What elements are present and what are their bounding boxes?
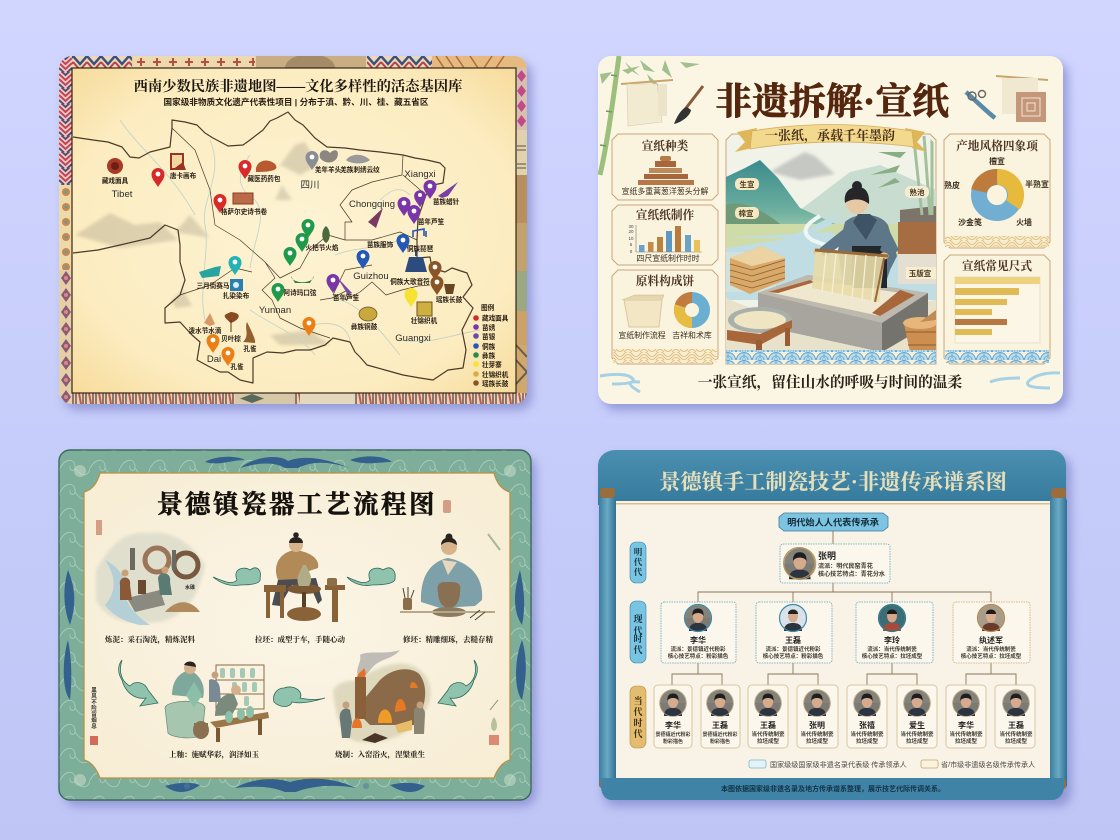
- map item labels: 苗年芦笙: [418, 217, 445, 226]
- node: Jiu Jianjun modern: 流派：当代传统制瓷: [966, 645, 1016, 653]
- sub-panel: style donut: 半熟宣: [1025, 179, 1049, 189]
- panel: Jingdezhen lineage chart: [598, 450, 1067, 800]
- icon: cloud scrolls: [600, 373, 1060, 392]
- map item labels: 壮锦织机: [411, 316, 438, 325]
- panel: southwest ethnic heritage map: [59, 54, 527, 404]
- node: Zhang Qiang: [847, 685, 887, 748]
- node: Jiu Jianjun modern: 核心技艺特点：拉坯成型: [961, 652, 1022, 660]
- node: Li Hua: [654, 685, 692, 748]
- era label: contemporary: 代: [633, 706, 643, 717]
- node: Wang Lei 2: 拉坯成型: [757, 737, 779, 745]
- step 5: firing kiln: [333, 650, 431, 743]
- mountain washes and rivers: [75, 120, 480, 355]
- sub-panel: common sizes chart: 宣纸常见尺式: [962, 259, 1032, 273]
- painter inscription and seals: 不: [91, 699, 97, 706]
- panel: xuan paper breakdown: [598, 56, 1063, 404]
- tree connectors: [672, 531, 1016, 686]
- painter inscription and seals: 险: [91, 704, 97, 712]
- lineage legend: [749, 760, 1035, 769]
- wooden basin and table: [727, 307, 792, 350]
- ornamental dragons: [64, 456, 526, 792]
- map item labels: 孔雀: [243, 344, 257, 353]
- node: Ai Sheng: [897, 685, 937, 748]
- node: Zhang Ming: 核心技艺特点：青花分水: [818, 570, 885, 578]
- place labels: Yunnan: [259, 305, 291, 316]
- closing line: 一张宣纸，留住山水的呼吸与时间的温柔: [698, 373, 962, 391]
- map legend: 彝族: [482, 351, 496, 360]
- province boundaries: [73, 112, 473, 383]
- sub-panel: raw materials donut: 宣纸制作流程: [618, 330, 666, 340]
- map item labels: 贝叶棕: [221, 334, 241, 343]
- painter inscription and seals: 息: [91, 722, 97, 730]
- sub-panel: production bar chart: 10: [628, 236, 634, 241]
- node: Li Hua modern: 流派：景德镇近代粉彩: [670, 645, 726, 653]
- node: Jiu Jianjun modern: [953, 602, 1030, 663]
- map legend: 壮锦织机: [482, 370, 509, 379]
- header pill: [779, 513, 888, 531]
- sub-panel: production bar chart: 宣纸纸制作: [636, 208, 695, 222]
- sub-panel: raw materials donut: 原料构成饼: [636, 274, 695, 288]
- node: Jiu Jianjun modern: 纨述军: [979, 635, 1003, 645]
- step captions bottom: [169, 749, 425, 760]
- place labels: 四川: [300, 180, 320, 191]
- ribbon banner: 一张纸，承载千年墨韵: [765, 128, 895, 144]
- map item labels: 藏医药药包: [248, 174, 281, 183]
- bamboo decoration: [600, 56, 700, 175]
- floor: [726, 298, 936, 350]
- map item labels: 藏戏面具: [102, 176, 129, 185]
- illustration tags: 熟池: [910, 187, 925, 197]
- sub-panel: production bar chart: 0: [630, 249, 633, 254]
- illustration tags: 玉版宣: [909, 268, 932, 278]
- left scroll roller: [599, 488, 616, 789]
- map item labels: 侗族琵琶: [407, 244, 434, 253]
- map item labels: 火把节火焰: [306, 243, 339, 252]
- map item labels: 苗年芦笙: [333, 293, 360, 302]
- map legend: 藏戏面具: [482, 314, 509, 322]
- hanging paper and rubbing right: [996, 76, 1048, 122]
- node: Li Hua modern: 李华: [690, 635, 706, 645]
- node: Wang Lei modern: 王磊: [785, 636, 801, 645]
- map legend: 苗银: [482, 332, 496, 341]
- vat: [758, 275, 928, 352]
- node: Wang Lei: 粉彩描色: [710, 738, 730, 745]
- era label: Ming: 代: [634, 557, 643, 567]
- ribbon banner: [735, 124, 927, 152]
- step 1: clay refining: 水碓: [185, 584, 195, 591]
- node: Wang Lei 3: 当代传统制瓷: [999, 730, 1033, 738]
- map subtitle: 国家级非物质文化遗产代表性项目 | 分布于滇、黔、川、桂、藏五省区: [164, 96, 429, 107]
- step captions top: 修坯：精雕细琢，去糙存精: [403, 634, 493, 645]
- bamboo screen: [812, 250, 888, 302]
- node: Li Hua 2: [946, 685, 986, 748]
- illustration tags: 生宣: [740, 179, 755, 189]
- place labels: [112, 169, 436, 365]
- step captions top: 炼泥：采石淘洗，精炼泥料: [104, 634, 195, 645]
- sub-panel: production bar chart: 30: [628, 224, 634, 229]
- map item labels: 苗族服饰: [367, 240, 394, 249]
- map legend: 瑶族长鼓: [482, 379, 509, 388]
- step 4: glazing: [165, 661, 269, 742]
- icon: ink brush: [674, 86, 703, 124]
- icon: tools right: [966, 90, 995, 118]
- node: Li Hua modern: [661, 602, 736, 663]
- cloud arrow left: [119, 660, 158, 706]
- node: Ai Sheng: 拉坯成型: [906, 737, 928, 745]
- paper mould box: [622, 295, 664, 327]
- map legend: 壮芽寨: [482, 360, 502, 369]
- era label: contemporary: 当: [633, 695, 643, 706]
- ethnic pattern border: [59, 54, 527, 404]
- node: Ai Sheng: 当代传统制瓷: [900, 730, 934, 738]
- node: Wang Lei: 王磊: [712, 721, 728, 730]
- title: 非遗拆解·宣纸: [715, 81, 949, 123]
- scroll paper: [613, 501, 1053, 779]
- node: Li Ling modern: 流派：当代传统制瓷: [867, 645, 917, 653]
- lineage legend: 国家级级国家级非遗名录代表级 传承领承人: [770, 760, 907, 769]
- node: Zhang Ming: 流派：明代民窑青花: [818, 562, 873, 570]
- map item labels: [102, 165, 463, 371]
- node: Wang Lei 3: 王磊: [1008, 721, 1024, 730]
- node: Li Ling modern: 李玲: [884, 635, 900, 645]
- map item labels: 苗族蜡针: [433, 197, 460, 206]
- sub-panel: production bar chart: 四尺宣纸制作时时: [636, 253, 700, 263]
- map item labels: 侗族大歌音符: [390, 277, 430, 286]
- painter inscription and seals: 留: [91, 710, 97, 718]
- node: Wang Lei 3: [995, 685, 1035, 748]
- node: Li Hua 2: 李华: [958, 720, 974, 730]
- map item labels: 羌年羊头: [315, 165, 342, 174]
- era label: contemporary: 代: [633, 728, 643, 739]
- step 2: potter throwing: [264, 532, 345, 622]
- node: Zhang Ming 2: [797, 685, 838, 748]
- bottom band: [601, 778, 1064, 800]
- right scroll roller: [1050, 488, 1067, 789]
- lineage legend: 省/市级非遗级名级传承传承人: [941, 760, 1035, 769]
- place labels: Guizhou: [353, 271, 389, 282]
- node: Ai Sheng: 爱生: [909, 720, 925, 730]
- map title: 西南少数民族非遗地图——文化多样性的活态基因库: [134, 77, 462, 95]
- sub-panel: style donut: [944, 134, 1050, 248]
- step captions bottom: 烧制：入窑浴火，涅槃重生: [334, 749, 425, 760]
- node: Wang Lei modern: [756, 602, 832, 663]
- map item labels: 孔雀: [230, 362, 244, 371]
- sub-panel: style donut: 火墙: [1016, 217, 1032, 227]
- hanging paper left: [621, 80, 673, 126]
- workshop building: [898, 206, 936, 284]
- cloud arrow right: [438, 660, 477, 706]
- node: Li Ling modern: 核心技艺特点：拉坯成型: [862, 652, 923, 660]
- map item labels: 羌族刺绣云纹: [340, 165, 380, 174]
- illustration tags: [735, 178, 936, 279]
- era label: contemporary: [630, 686, 646, 748]
- map item labels: 彝族铜鼓: [351, 322, 378, 331]
- craftsman: [814, 181, 899, 288]
- sub-panel: style donut: 檀宣: [989, 156, 1005, 166]
- wooden bucket: [903, 310, 937, 352]
- node: Wang Lei modern: 流派：景德镇近代粉彩: [765, 645, 821, 653]
- donut: [979, 177, 1016, 213]
- sub-panel: paper types: 宣纸多重蒿葱洋葱头分解: [622, 186, 709, 196]
- sub-panel: style donut: 沙金笺: [958, 217, 982, 227]
- node: Wang Lei: 景德镇近代粉彩: [702, 731, 738, 738]
- sub-panel: raw materials donut: [612, 270, 718, 364]
- cream scroll panel: [84, 473, 510, 778]
- footer note: 本图依据国家级非遗名录及地方传承谱系整理，展示技艺代际传调关系。: [721, 784, 945, 793]
- fields and river: [726, 224, 898, 256]
- era label: Ming: [630, 542, 646, 583]
- sub-panel: production bar chart: 5: [630, 242, 633, 247]
- node: Wang Lei 2: [748, 685, 788, 748]
- painter inscription and seals: 黑: [91, 687, 97, 694]
- step captions top: 拉坯：成型于车，手随心动: [255, 634, 345, 645]
- node: Li Hua 2: 拉坯成型: [955, 737, 977, 745]
- sub-panel: style donut: 产地风格四象项: [956, 139, 1039, 153]
- node: Li Hua: 景德镇近代粉彩: [655, 731, 691, 738]
- map item labels: 唐卡画布: [170, 171, 197, 180]
- map legend: 图例: [481, 303, 495, 312]
- seals: [96, 500, 451, 535]
- era label: modern: [630, 601, 646, 663]
- cloud arrows top: [213, 568, 395, 586]
- node: Wang Lei 3: 拉坯成型: [1005, 737, 1027, 745]
- painter inscription and seals: [90, 534, 500, 745]
- step 1: clay refining: [96, 532, 205, 625]
- node: Wang Lei modern: 核心技艺特点：粉彩描色: [763, 652, 824, 660]
- era label: contemporary: 时: [633, 717, 643, 728]
- bars: [636, 225, 702, 252]
- step 3: trimming: [400, 534, 495, 620]
- place labels: Dai: [207, 354, 221, 365]
- map item labels: 三月街赛马: [197, 281, 230, 290]
- parchment map panel: [72, 68, 516, 393]
- map item labels: 扎染染布: [223, 291, 250, 300]
- illustration tags: 棉宣: [738, 208, 754, 218]
- node: Wang Lei 2: 当代传统制瓷: [751, 730, 785, 738]
- main illustration: paper making: [726, 134, 937, 364]
- era label: modern: 代: [633, 625, 643, 636]
- painter inscription and seals: 烟: [91, 716, 97, 724]
- era label: Ming: 代: [634, 567, 643, 577]
- node: Li Hua 2: 当代传统制瓷: [949, 730, 983, 738]
- node: Zhang Ming: 张明: [818, 550, 836, 561]
- era label: modern: 时: [633, 633, 643, 644]
- map heritage icons: [107, 150, 458, 343]
- paper stack: [730, 246, 785, 294]
- title: 景德镇手工制瓷技艺·非遗传承谱系图: [659, 469, 1007, 494]
- card shadows: [64, 62, 1071, 806]
- map legend: [473, 303, 509, 388]
- map legend: 侗族: [482, 342, 496, 351]
- node: Li Hua modern: 核心技艺特点：粉彩描色: [668, 652, 729, 660]
- node: Li Hua: 李华: [665, 720, 681, 730]
- map item labels: 瑶族长鼓: [436, 295, 463, 304]
- map item labels: 阿诗玛口弦: [284, 288, 317, 297]
- sub-panel: production bar chart: [612, 205, 718, 265]
- header pill: 明代始人人代表传承承: [787, 516, 879, 528]
- bamboo right: [914, 136, 932, 215]
- place labels: Chongqing: [349, 199, 395, 210]
- map pins: [152, 151, 444, 366]
- sub-panel: style donut: 熟皮: [944, 180, 960, 190]
- mountains: [726, 151, 936, 224]
- cloud arrow middle: [273, 687, 325, 706]
- sub-panel: production bar chart: 20: [628, 229, 634, 234]
- node: Wang Lei 2: 王磊: [760, 721, 776, 730]
- map legend: 苗绣: [482, 323, 496, 332]
- pyramid chart: [638, 156, 694, 185]
- era label: Ming: 明: [634, 547, 643, 557]
- sub-panel: raw materials donut: 吉祥和术库: [672, 330, 712, 340]
- place labels: Tibet: [112, 189, 133, 200]
- map item labels: 格萨尔史诗书卷: [221, 207, 267, 216]
- node: Zhang Qiang: 张禧: [859, 720, 875, 730]
- panel: Jingdezhen porcelain process: [59, 450, 531, 800]
- node: Li Hua: 粉彩描色: [663, 738, 683, 745]
- donut: [679, 297, 704, 323]
- node: Zhang Ming 2: 当代传统制瓷: [800, 730, 834, 738]
- title: 景德镇瓷器工艺流程图: [157, 490, 437, 519]
- node: Zhang Ming 2: 拉坯成型: [806, 737, 828, 745]
- step captions bottom: 上釉：施赋华彩，润泽如玉: [169, 749, 259, 760]
- map item labels: 泼水节水滴: [189, 326, 222, 335]
- sub-panel: paper types: 宣纸种类: [642, 139, 689, 153]
- place labels: Xiangxi: [404, 169, 436, 180]
- node: Wang Lei: [701, 685, 740, 748]
- painter inscription and seals: 风: [91, 693, 97, 700]
- era label: modern: 代: [633, 644, 643, 655]
- node: Zhang Qiang: 拉坯成型: [856, 737, 878, 745]
- place labels: Guangxi: [395, 333, 431, 344]
- sub-panel: paper types: [612, 134, 718, 200]
- node: Zhang Ming: [780, 544, 890, 583]
- wave band: [726, 350, 936, 364]
- node: Zhang Qiang: 当代传统制瓷: [850, 730, 884, 738]
- era label: modern: 现: [633, 614, 643, 624]
- step captions top: [104, 634, 493, 645]
- node: Zhang Ming 2: 张明: [809, 721, 825, 730]
- contemporary nodes: [654, 685, 1035, 748]
- corner floral ornaments: [74, 465, 516, 789]
- horizontal bars: [955, 277, 1040, 343]
- node: Li Ling modern: [856, 602, 933, 663]
- sub-panel: common sizes chart: [944, 255, 1050, 364]
